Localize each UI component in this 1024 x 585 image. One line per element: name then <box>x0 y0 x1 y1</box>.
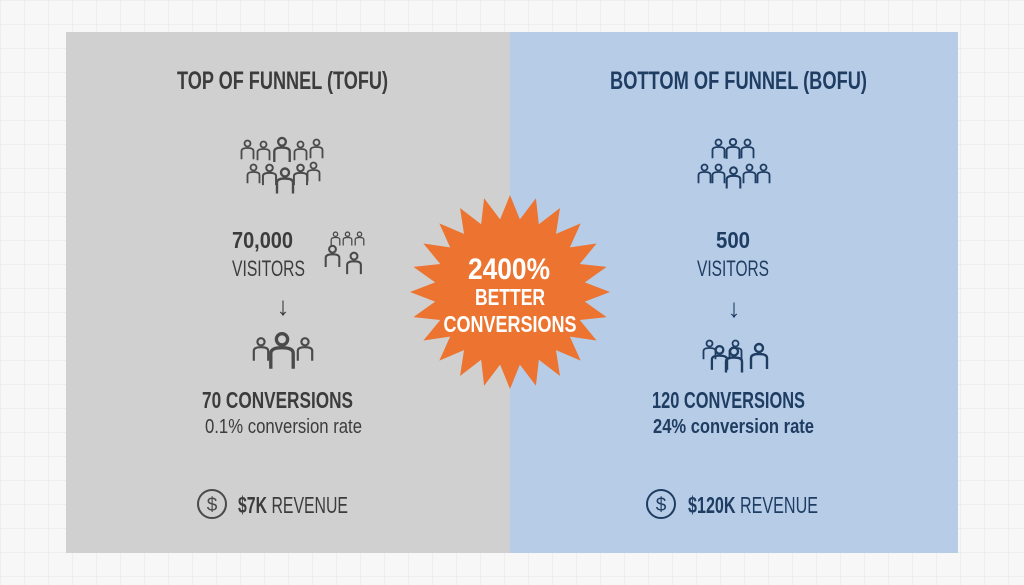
arrow: ↓ <box>728 293 740 323</box>
text: 70,000 visitors: 70,000 <box>232 227 293 253</box>
text: 70 conversions: 70 CONVERSIONS <box>202 387 353 413</box>
arrow: ↓ <box>276 291 290 321</box>
panel: top of funnel <box>66 32 510 553</box>
callout: starburst <box>410 195 610 389</box>
icon: small group <box>326 232 364 274</box>
text: 500 visitors: 500 <box>716 227 750 253</box>
text: 120 conversions: 24% conversion rate <box>653 416 814 438</box>
revenue: $120K <box>647 490 818 518</box>
text: 500 visitors: VISITORS <box>697 256 769 281</box>
revenue: $7K <box>198 490 348 518</box>
text: 70,000 visitors <box>232 227 305 281</box>
icon: converters <box>254 334 312 369</box>
heading: BOFU: BOTTOM OF FUNNEL (BOFU) <box>610 67 867 95</box>
callout: starburst: CONVERSIONS <box>444 311 576 337</box>
icon: converters <box>704 340 767 372</box>
callout: starburst: 2400% <box>468 253 550 286</box>
panel: bottom of funnel <box>510 32 958 553</box>
text: 70,000 visitors: VISITORS <box>232 256 305 281</box>
icon: large crowd <box>242 138 322 194</box>
text: 120 conversions: 120 CONVERSIONS <box>652 387 805 413</box>
text: 120 conversions <box>652 387 814 438</box>
heading: TOFU: TOP OF FUNNEL (TOFU) <box>177 67 388 95</box>
text: 70 conversions <box>202 387 362 438</box>
icon: crowd <box>698 139 770 189</box>
revenue: $120K: $120K REVENUE <box>688 492 818 518</box>
revenue: $120K: $ <box>656 495 667 516</box>
revenue: $7K: $ <box>207 495 218 516</box>
callout: starburst: BETTER <box>475 284 545 310</box>
text: 500 visitors <box>697 227 769 281</box>
revenue: $7K: $7K REVENUE <box>238 492 348 518</box>
text: 70 conversions: 0.1% conversion rate <box>205 416 362 438</box>
